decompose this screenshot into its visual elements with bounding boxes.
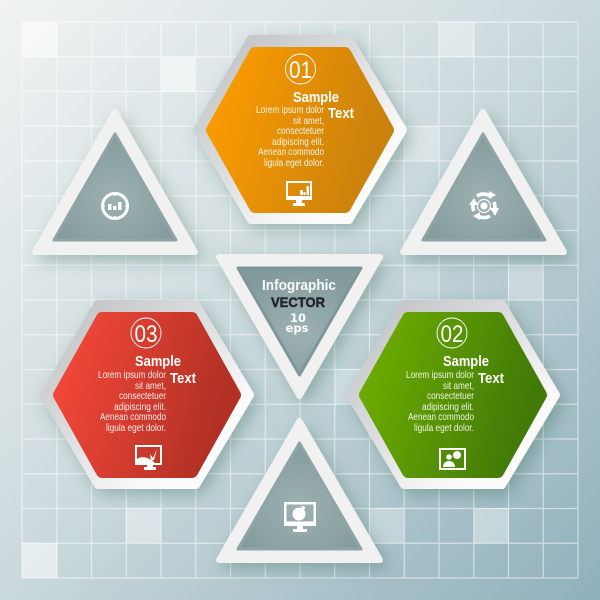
body text: consectetuer [277,125,324,137]
body text: sit amet, [135,380,166,392]
icon: monitor with pie [284,502,316,532]
heading: Sample Text: Text [478,371,504,387]
triangle panel: right [403,112,564,252]
heading: Sample Text: Text [328,106,354,122]
heading: Sample Text: Text [170,371,196,387]
body text: adipiscing elit. [422,401,474,413]
body text: ligula eget dolor. [414,422,474,434]
heading: Sample Text [443,354,504,387]
label: 10 eps: eps [286,321,309,335]
hexagon panel: 02 [350,304,556,485]
body text: consectetuer [119,390,166,402]
body text: ligula eget dolor. [264,157,324,169]
body text: Lorem ipsum dolor [406,369,474,381]
body text: sit amet, [293,115,324,127]
body text: Lorem ipsum dolor [256,104,324,116]
icon: monitor with brush [135,445,162,470]
body text: Aenean commodo [100,411,166,423]
hexagon panel: 03 [44,304,250,485]
body text [256,104,324,169]
body text: Aenean commodo [408,411,474,423]
triangle panel: bottom [219,421,380,560]
triangle panel: left [35,112,195,252]
label: 10 eps [286,311,309,335]
icon: monitor with bars [286,181,312,206]
body text: sit amet, [443,380,474,392]
icon: chart in target circle [101,192,129,220]
triangle panel: centre [219,257,380,396]
label: 10 eps: 10 [290,311,306,325]
number badge: 03: 03 [134,321,158,348]
hexagon panel: 01 [197,39,403,220]
heading: Sample Text: Sample [135,354,181,370]
body text: ligula eget dolor. [106,422,166,434]
body text: consectetuer [427,390,474,402]
number badge: 02: 02 [440,321,464,348]
body text: Lorem ipsum dolor [98,369,166,381]
body text: adipiscing elit. [272,136,324,148]
heading: Sample Text: Sample [293,90,339,106]
icon: presentation board [439,448,466,470]
body text: Aenean commodo [258,146,324,158]
body text [98,369,166,434]
heading: VECTOR: VECTOR [271,294,325,310]
heading: Infographic: Infographic [262,278,336,294]
icon: cycle arrows [469,191,499,220]
heading: Sample Text: Sample [443,354,489,370]
heading: Sample Text [135,354,196,387]
number badge: 01: 01 [289,57,312,84]
body text: adipiscing elit. [114,401,166,413]
heading: Sample Text [293,90,354,122]
body text [406,369,474,434]
